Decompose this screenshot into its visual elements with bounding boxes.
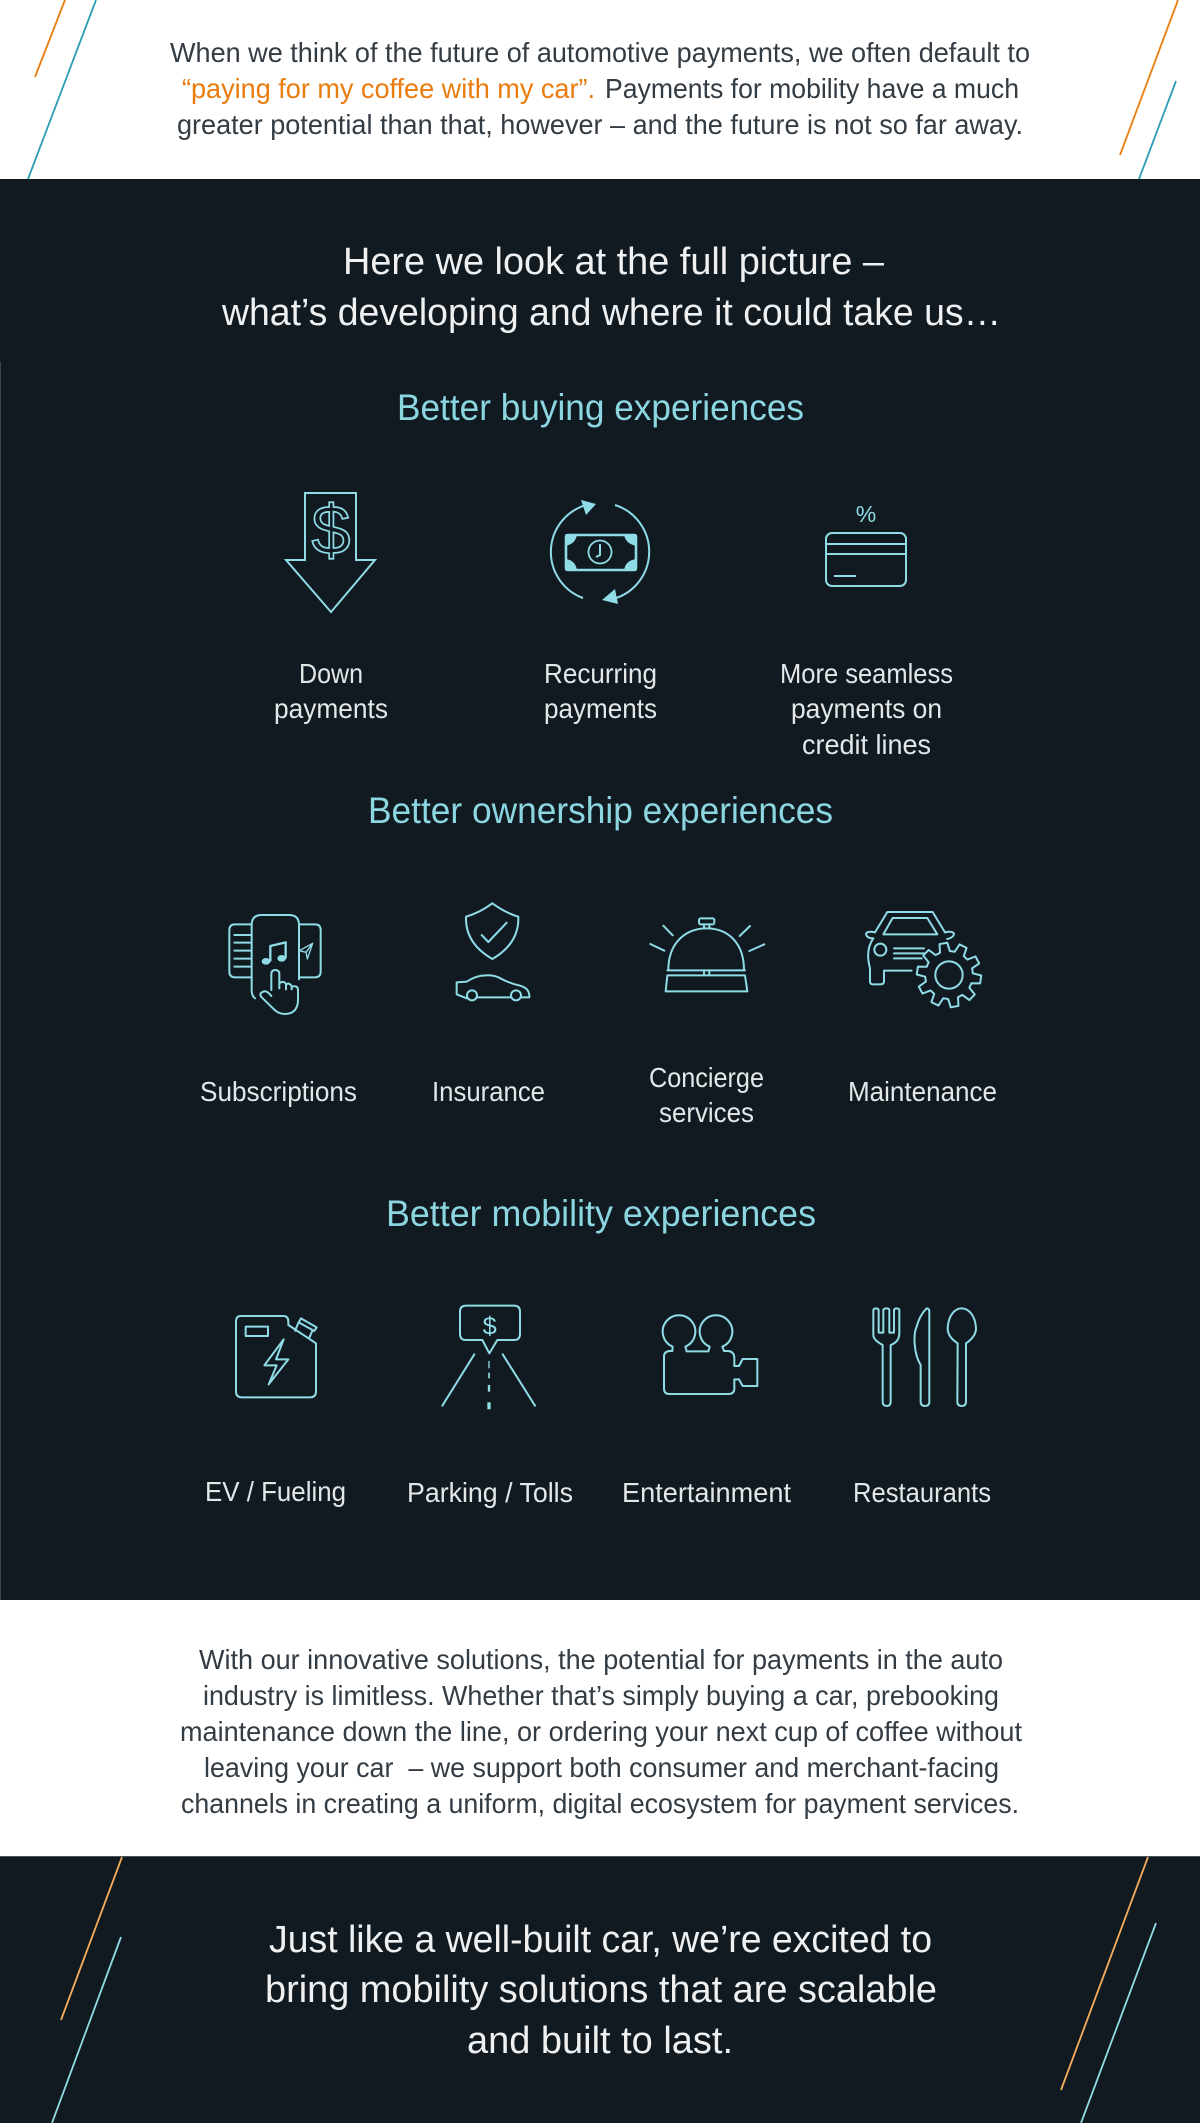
heading: better ownership: Better ownership experiences (368, 790, 833, 831)
label: seamless payments (780, 658, 953, 760)
icon: phone with music and hand (229, 915, 321, 1014)
label: down payments: Down (299, 658, 363, 689)
solutions paragraph: With our innovative solutions, the potential for payments in the auto (199, 1644, 1003, 1675)
icon: down arrow with dollar (286, 491, 375, 612)
label: restaurants: Restaurants (853, 1477, 991, 1508)
main heading (221, 241, 1001, 334)
item: entertainment (622, 1315, 791, 1508)
label: seamless payments: More seamless (780, 658, 953, 689)
label: concierge services (649, 1062, 764, 1128)
section: better mobility experiences (205, 1193, 991, 1508)
icon: down arrow with dollar: $ (312, 491, 350, 569)
closing text: bring mobility solutions that are scalable (265, 1969, 937, 2011)
icon: car and gear (866, 912, 985, 1011)
solutions paragraph: channels in creating a uniform, digital ecosystem for payment services. (181, 1788, 1019, 1819)
solutions paragraph: industry is limitless. Whether that’s simply buying a car, prebooking (203, 1680, 999, 1711)
item: maintenance (848, 912, 997, 1107)
intro paragraph: When we think of the future of automotive payments, we often default to (170, 37, 1030, 68)
item: parking tolls (407, 1306, 573, 1508)
icon: shield and car (457, 903, 529, 1000)
icon: fuel can with lightning bolt (236, 1316, 317, 1397)
item: subscriptions (200, 915, 357, 1107)
label: down payments (274, 658, 388, 724)
solutions paragraph: maintenance down the line, or ordering your next cup of coffee without (180, 1716, 1022, 1747)
label: entertainment: Entertainment (622, 1477, 791, 1508)
intro paragraph: greater potential than that, however – and the future is not so far away. (177, 109, 1023, 140)
item: restaurants (853, 1308, 991, 1508)
icon: service bell (650, 918, 764, 991)
closing text (265, 1919, 937, 2062)
label: recurring payments: payments (544, 693, 657, 724)
item: down payments (274, 491, 388, 724)
solutions paragraph (180, 1644, 1022, 1819)
section: better buying experiences (274, 387, 953, 760)
icon: credit card with percent (826, 501, 906, 586)
label: concierge services: Concierge (649, 1062, 764, 1093)
item: seamless payments on credit lines (780, 501, 953, 760)
item: recurring payments (544, 500, 657, 724)
intro paragraph: Payments for mobility have a much (605, 73, 1019, 104)
label: seamless payments: payments on (791, 693, 942, 724)
item: insurance (432, 903, 545, 1107)
label: subscriptions: Subscriptions (200, 1076, 357, 1107)
label: recurring payments: Recurring (544, 658, 657, 689)
icon: road with toll marker: $ (483, 1312, 497, 1340)
panel: closing statement (0, 1856, 1200, 2123)
heading: better buying: Better buying experiences (397, 387, 804, 428)
label: ev fueling: EV / Fueling (205, 1476, 346, 1507)
label: seamless payments: credit lines (802, 729, 931, 760)
panel: main dark section (0, 179, 1200, 1600)
intro paragraph (170, 37, 1030, 140)
main heading: Here we look at the full picture – (343, 241, 885, 283)
icon: fork knife spoon (873, 1308, 976, 1406)
icon: cycling banknote (551, 500, 649, 604)
label: down payments: payments (274, 693, 388, 724)
label: concierge services: services (659, 1097, 754, 1128)
label: recurring payments (544, 658, 657, 724)
panel: innovative solutions text (0, 1600, 1200, 1856)
section: better ownership experiences (200, 790, 997, 1128)
panel: intro (0, 0, 1200, 179)
label: insurance: Insurance (432, 1076, 545, 1107)
item: ev fueling (205, 1316, 346, 1507)
icon: film camera (663, 1315, 757, 1394)
label: parking tolls: Parking / Tolls (407, 1477, 573, 1508)
closing text: and built to last. (467, 2020, 733, 2062)
heading: better mobility: Better mobility experiences (386, 1193, 816, 1234)
label: maintenance: Maintenance (848, 1076, 997, 1107)
closing text: Just like a well-built car, we’re excited to (269, 1919, 932, 1961)
solutions paragraph: leaving your car – we support both consumer and merchant-facing (204, 1752, 999, 1783)
intro paragraph: “paying for my coffee with my car”. (182, 73, 595, 104)
item: concierge services (649, 918, 764, 1128)
main heading: what’s developing and where it could take us… (221, 292, 1001, 334)
icon: road with toll marker (442, 1306, 535, 1409)
icon: credit card with percent: % (856, 501, 876, 527)
